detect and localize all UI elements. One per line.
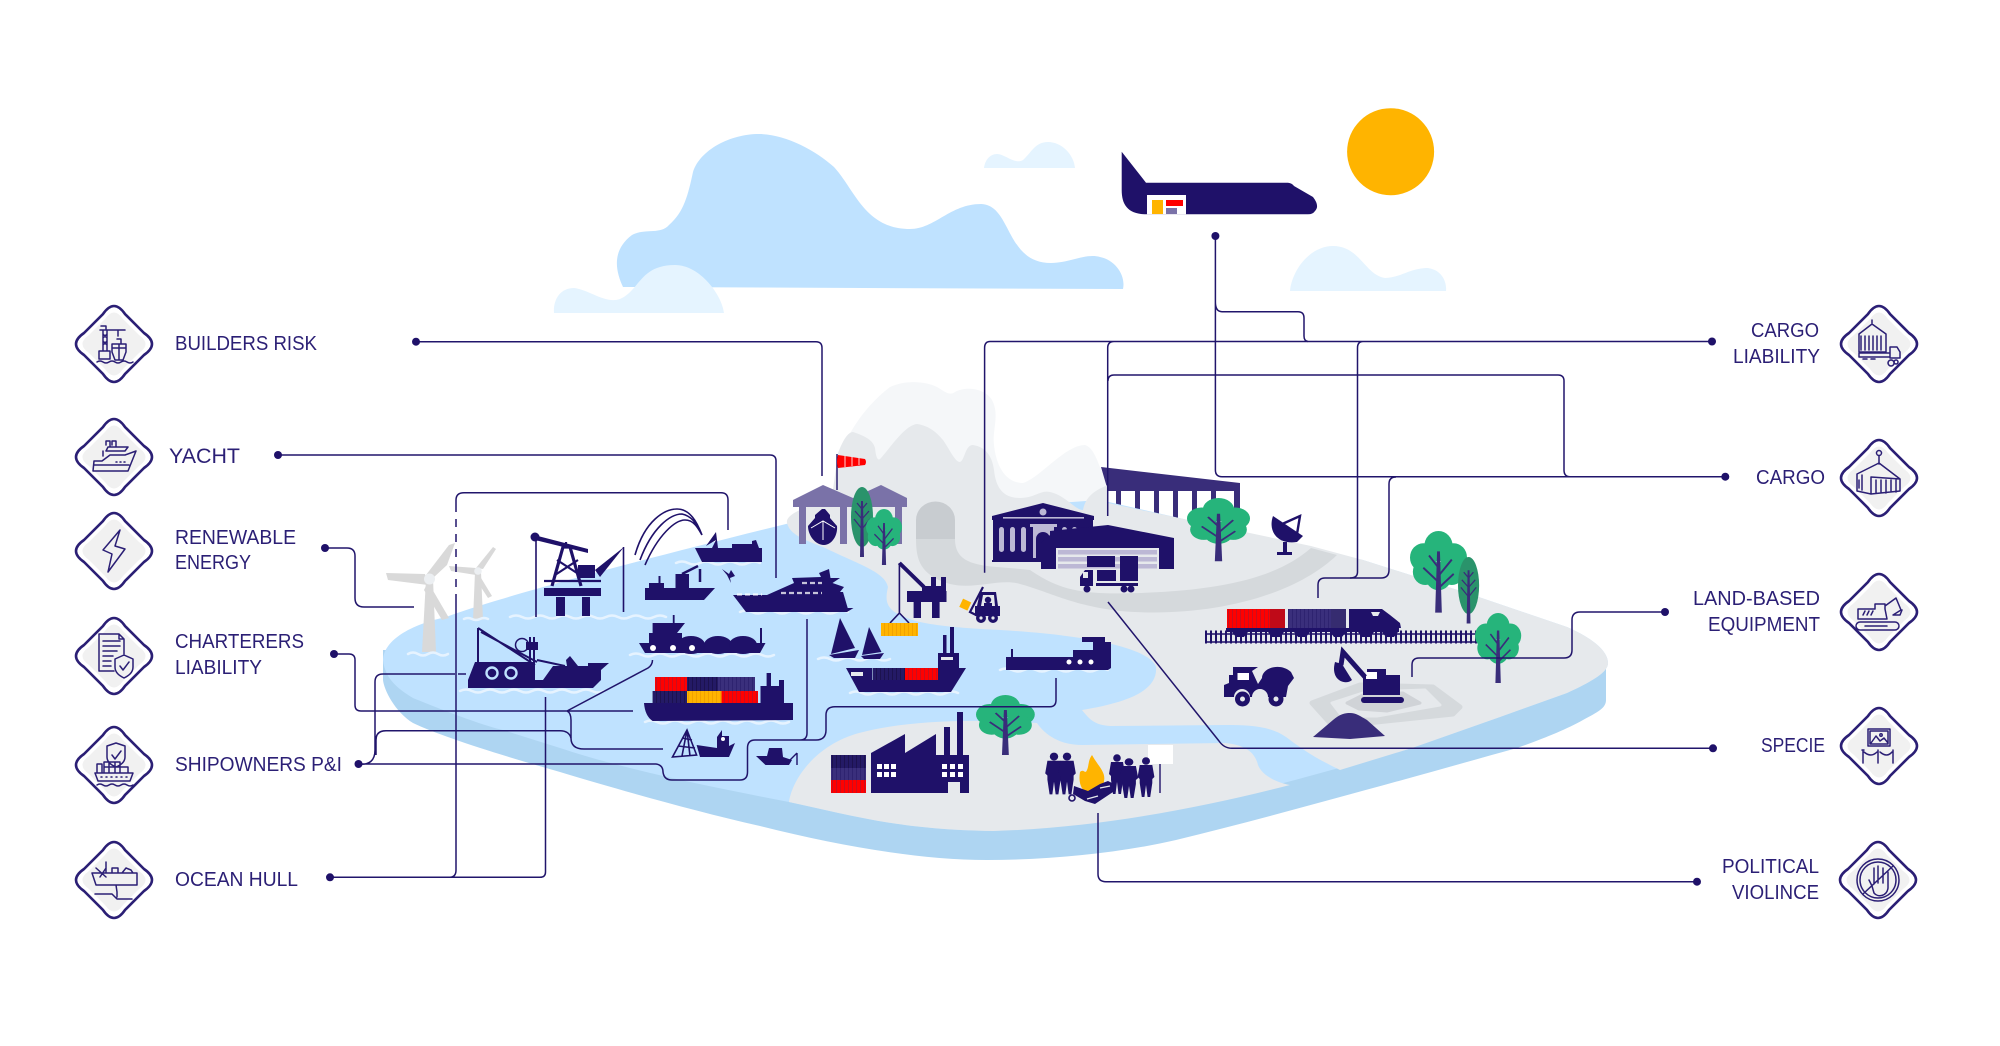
icon: cargo liability xyxy=(1841,306,1917,382)
plane xyxy=(1122,152,1317,214)
connector lines xyxy=(278,236,1725,882)
icon: specie xyxy=(1841,708,1917,784)
cloud: right cloud xyxy=(1290,246,1446,291)
mixer truck xyxy=(1224,667,1294,706)
forklift xyxy=(959,587,1000,623)
text: charterers liability: CHARTERERS xyxy=(175,631,304,653)
text: political violence: POLITICAL xyxy=(1722,856,1819,878)
island: water surface xyxy=(383,500,1608,831)
text: specie: SPECIE xyxy=(1761,735,1825,757)
icon: cargo xyxy=(1841,440,1917,516)
island: blue side wall xyxy=(383,650,1606,860)
offshore crane platform xyxy=(890,563,946,623)
yacht xyxy=(733,569,854,612)
text: ocean hull: OCEAN HULL xyxy=(175,869,298,891)
text: renewable energy xyxy=(175,527,296,574)
text: cargo: CARGO xyxy=(1756,467,1825,489)
line: cargo xyxy=(1108,375,1570,578)
line: aviation feed xyxy=(1215,236,1725,477)
line: renewable energy xyxy=(325,548,414,607)
hangar trees xyxy=(851,487,902,565)
tree by warehouse xyxy=(1187,498,1250,561)
train xyxy=(1226,609,1401,637)
fishing boat with net xyxy=(672,730,735,757)
gravel pile xyxy=(1313,713,1385,739)
hanging yellow container xyxy=(881,623,918,636)
line: land-based equipment xyxy=(1412,612,1665,677)
seabird xyxy=(722,569,735,583)
text: land-based equipment: EQUIPMENT xyxy=(1708,614,1820,636)
icon: shipowners p&i xyxy=(76,727,152,803)
windsock xyxy=(837,454,866,490)
line: specie xyxy=(1108,602,1713,748)
barge xyxy=(1006,637,1111,670)
big trees near rail xyxy=(1410,531,1479,624)
cloud: large sky cloud xyxy=(617,134,1123,289)
line: builders risk xyxy=(416,342,822,476)
text: cargo liability xyxy=(1733,320,1820,368)
hangar with ship xyxy=(793,485,907,545)
line: political violence xyxy=(1098,813,1697,882)
tree right xyxy=(1475,613,1521,683)
mountain: pale outer ridge xyxy=(838,382,1108,510)
line: ocean hull dashes xyxy=(456,504,466,674)
cable laying vessel xyxy=(468,628,609,688)
text: charterers liability: LIABILITY xyxy=(175,657,262,679)
line: charterers liability xyxy=(334,654,663,749)
tug with crane xyxy=(645,566,715,600)
text: renewable energy: RENEWABLE xyxy=(175,527,296,549)
oil rig xyxy=(530,532,624,617)
text: cargo liability: LIABILITY xyxy=(1733,346,1820,368)
text: yacht: YACHT xyxy=(169,445,240,468)
cargo ship xyxy=(846,627,966,692)
cloud: small front cloud xyxy=(554,265,724,313)
warehouse with truck xyxy=(1041,525,1174,592)
line: shipowners xyxy=(358,619,1056,780)
railway track xyxy=(1205,634,1478,642)
icon: builders risk xyxy=(76,306,152,382)
island: upper land with mountain xyxy=(787,424,1608,770)
protest scene xyxy=(1045,745,1173,804)
sun xyxy=(1347,108,1434,195)
factory with containers xyxy=(831,712,969,793)
cloud: small top cloud xyxy=(984,142,1075,168)
wind turbines xyxy=(386,543,496,652)
small boat xyxy=(756,748,797,765)
icon: ocean hull xyxy=(76,842,152,918)
excavator xyxy=(1334,652,1404,703)
satellite dish xyxy=(1272,516,1303,555)
excavation site rings xyxy=(1312,685,1460,723)
line: yacht xyxy=(278,455,776,578)
water jet arcs xyxy=(635,509,702,565)
icon: land-based equipment xyxy=(1841,574,1917,650)
icon: yacht xyxy=(76,419,152,495)
tree by factory xyxy=(976,695,1035,755)
dredger ship xyxy=(695,532,762,562)
icon: charterers liability xyxy=(76,618,152,694)
water ripples xyxy=(408,562,1108,724)
sailboats xyxy=(829,618,884,659)
bank building xyxy=(992,503,1096,562)
warehouse: back open shed xyxy=(1101,467,1240,530)
icon: political violence xyxy=(1840,842,1916,918)
LNG carrier xyxy=(639,615,766,654)
text: land-based equipment xyxy=(1693,588,1820,636)
text: political violence xyxy=(1722,856,1819,904)
connector end dots xyxy=(274,232,1729,886)
road and tunnel xyxy=(916,502,1337,612)
container ship xyxy=(644,673,793,721)
text: shipowners p&i: SHIPOWNERS P&I xyxy=(175,754,342,776)
line: cargo liability xyxy=(985,342,1712,598)
text: land-based equipment: LAND-BASED xyxy=(1693,588,1820,610)
icon: renewable energy xyxy=(76,513,152,589)
text: renewable energy: ENERGY xyxy=(175,552,251,574)
island: lower land xyxy=(789,721,1290,831)
text: cargo liability: CARGO xyxy=(1751,320,1819,342)
text: builders risk: BUILDERS RISK xyxy=(175,333,318,355)
line: ocean hull xyxy=(330,493,728,877)
text: charterers liability xyxy=(175,631,304,679)
text: political violence: VIOLINCE xyxy=(1732,882,1819,904)
